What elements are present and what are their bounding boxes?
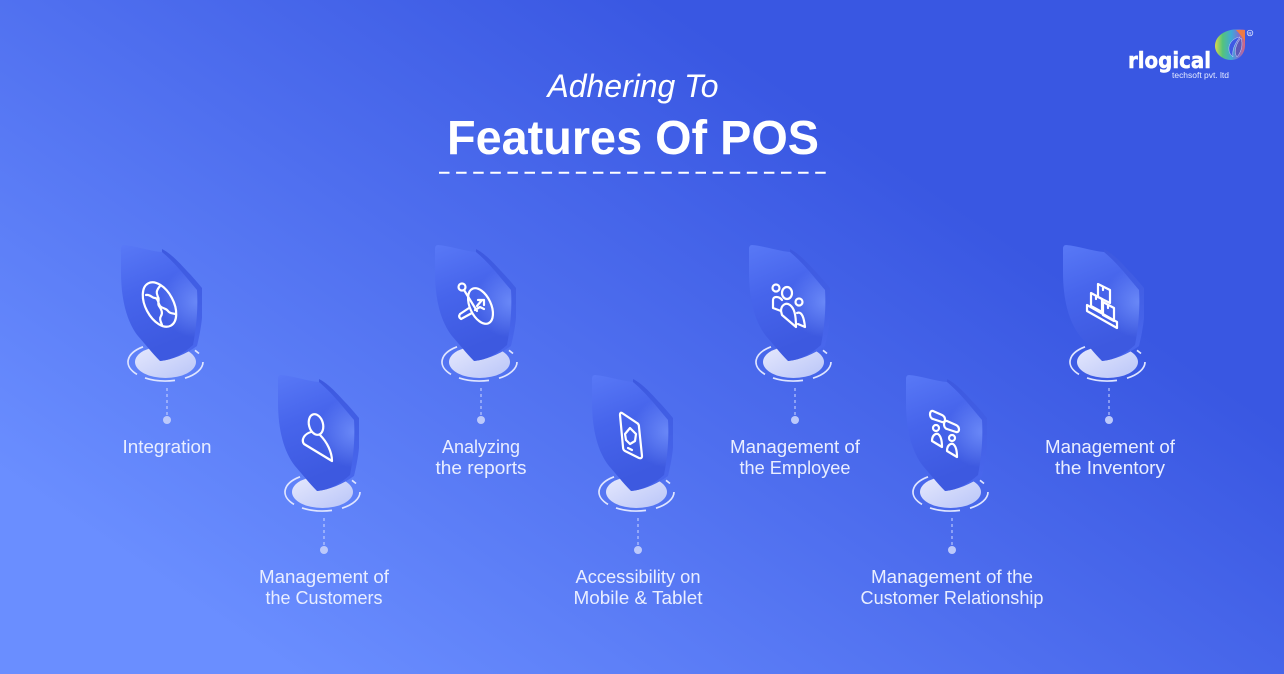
label: customer relationship	[860, 567, 1044, 608]
label: mobile: Mobile & Tablet	[574, 588, 702, 608]
label: reports: the reports	[436, 458, 526, 478]
shield: reports	[435, 245, 517, 424]
label: mobile	[574, 567, 702, 608]
label: customers	[259, 567, 390, 608]
shield: inventory	[1063, 245, 1145, 424]
label: reports: Analyzing	[442, 437, 520, 457]
label: integration: Integration	[122, 437, 212, 457]
title dashed underline	[439, 172, 827, 174]
icon: stacked boxes	[1087, 284, 1117, 328]
label: customers: the Customers	[266, 588, 382, 608]
label: employee: Management of	[730, 437, 861, 457]
label: reports	[436, 437, 526, 478]
icon: person	[303, 413, 332, 461]
subtitle: Adhering To	[546, 68, 718, 104]
label: employee: the Employee	[740, 458, 850, 478]
logo mark	[1215, 29, 1245, 60]
shield: customers	[278, 375, 360, 554]
label: inventory: the Inventory	[1055, 458, 1165, 478]
label: inventory: Management of	[1045, 437, 1176, 457]
label: mobile: Accessibility on	[576, 567, 700, 587]
logo: rlogical	[1128, 29, 1253, 80]
icon: magnifier chart	[458, 284, 498, 328]
registered mark: R	[1248, 31, 1252, 36]
icon: people group	[772, 284, 805, 327]
logo tagline: techsoft pvt. ltd	[1172, 71, 1229, 80]
shield: mobile	[592, 375, 674, 554]
label: customer relationship: Management of the	[871, 567, 1033, 587]
icon: puzzle globe	[136, 277, 183, 332]
label: inventory	[1045, 437, 1176, 478]
logo wordmark: rlogical	[1128, 49, 1211, 74]
shield: integration	[121, 245, 203, 424]
shield: employee	[749, 245, 831, 424]
shield: customer relationship	[906, 375, 988, 554]
label: employee	[730, 437, 861, 478]
icon: mobile with house	[620, 413, 642, 458]
title: Features Of POS	[447, 112, 819, 165]
label: customers: Management of	[259, 567, 390, 587]
label: customer relationship: Customer Relationship	[860, 588, 1044, 608]
icon: linked customers	[930, 411, 959, 457]
